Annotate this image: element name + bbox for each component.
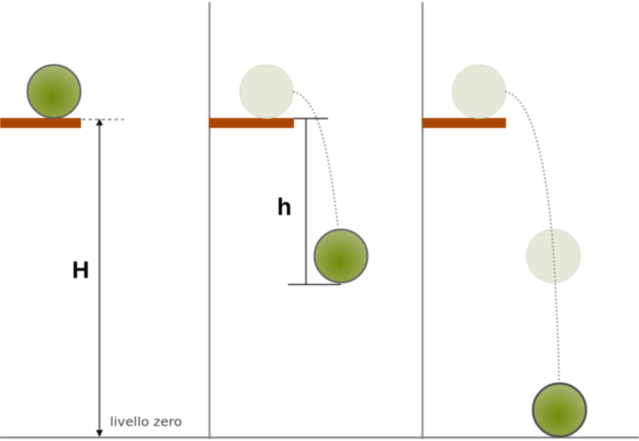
label: livello zero: livello zero — [110, 414, 182, 429]
ghost ball — [240, 65, 293, 118]
dimension: h — [288, 118, 341, 284]
shelf — [0, 118, 81, 128]
trajectory — [293, 92, 338, 227]
trajectory — [505, 92, 559, 382]
ball — [28, 65, 80, 118]
label: H: H — [72, 257, 89, 284]
ball — [533, 384, 586, 436]
ghost ball top — [452, 65, 506, 118]
shelf — [209, 118, 294, 128]
panel: ball falling — [209, 65, 368, 284]
panel: ball at rest — [0, 65, 182, 437]
label: h: h — [277, 194, 292, 221]
dashed level line — [82, 118, 124, 120]
ball — [314, 230, 368, 282]
panel: ball at ground — [422, 65, 586, 436]
arrow: height H — [96, 118, 103, 437]
ghost ball middle — [527, 230, 580, 282]
shelf — [422, 118, 506, 128]
